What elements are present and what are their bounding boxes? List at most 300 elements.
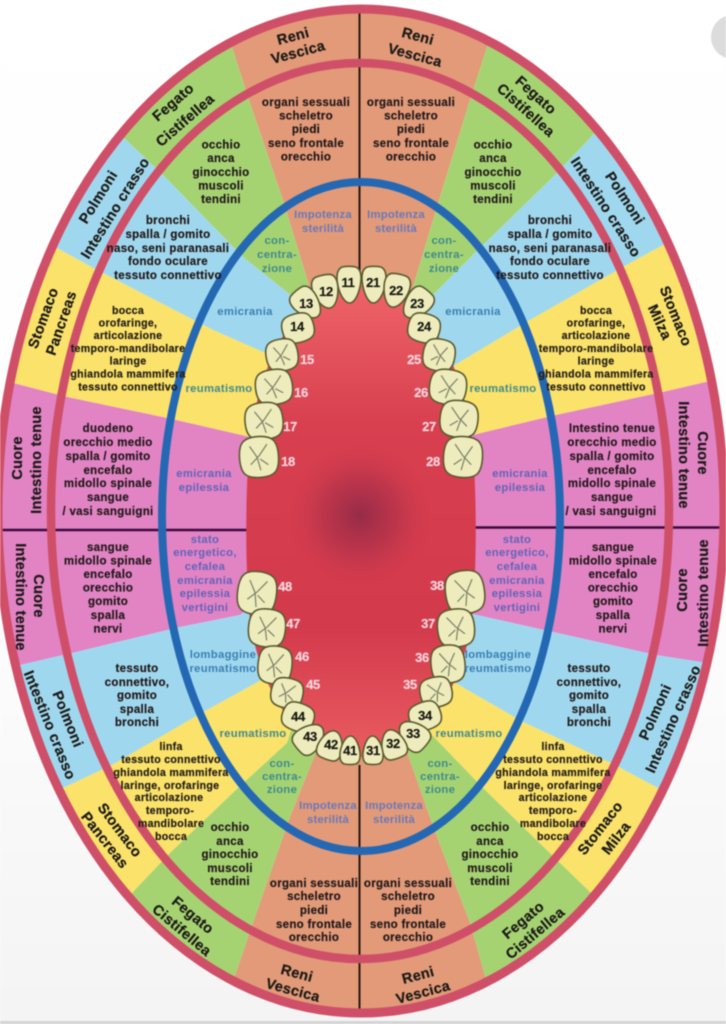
inner label: concentrazione lower left: centra- [262,771,302,783]
inner label: reumatismo upper right: reumatismo [469,383,537,395]
outer label: Cuore Intestino tenue lower right: Intestino tenue [696,539,712,647]
inner label: emicrania upper left: emicrania [217,306,273,318]
tooth 27 [422,399,480,439]
outer label: Reni Vescica lower left [264,962,322,1006]
tooth 32 [376,726,410,762]
tooth 27: 27 [422,419,436,434]
text: duodeno upper left: duodeno [83,423,133,435]
inner label: concentrazione lower left: con- [269,758,295,770]
inner label: Impotenza lower right: Impotenza [365,800,423,812]
text: intestino tenue upper right: orecchio medio [567,437,657,449]
tooth 37 [421,607,476,649]
tooth 33: 33 [406,726,420,741]
sector: Stomaco upper left [14,248,269,438]
inner label: concentrazione upper left: centra- [257,249,297,261]
text: duodeno upper left: encefalo [83,465,133,477]
text: sangue lower right: encefalo [588,569,638,581]
text: organi upper right: scheletro [384,110,438,122]
outer label: Cuore Intestino tenue upper left: Intestino tenue [29,406,45,514]
text: sangue lower left: encefalo [83,569,133,581]
tooth 28 [426,435,484,479]
tooth 25: 25 [407,352,421,367]
inner label: stato energetico left: stato [191,534,219,546]
tooth 46 [256,644,309,686]
text: sangue lower right: orecchio [588,582,638,594]
outer label: Reni Vescica upper right: Vescica [386,41,444,71]
outer label: Stomaco Milza lower right: Stomaco [575,799,627,858]
outer label: Polmoni Intestino crasso upper right: Intestino crasso [567,155,643,261]
text: organi lower right: orecchio [383,932,433,944]
inner label: stato energetico left: cefalea [185,561,226,573]
sector: Reni lower right [359,753,486,1010]
tooth 47: 47 [286,616,300,631]
tooth 41: 41 [343,743,357,758]
text: occhio upper right: occhio [474,140,512,152]
inner label: concentrazione lower right: con- [427,758,453,770]
tooth 25 [407,336,458,374]
text: duodeno upper left: sangue [87,492,129,504]
inner label: stato energetico left: emicrania [177,575,233,587]
text: occhio upper left: ginocchio [192,167,250,179]
tooth 36 [415,643,467,685]
axis: horizontal midline [0,528,724,530]
axis: vertical midline [358,13,360,1012]
sector: Polmoni lower left [20,612,261,788]
text: duodeno upper left: spalla / gomito [65,451,151,463]
outer label: Reni Vescica lower right [394,964,453,1008]
tooth 43: 43 [303,729,317,744]
text: linfa lower right: laringe, orofaringe [504,780,602,792]
text: tessuto lower left: tessuto [116,663,158,675]
text: occhio lower left: tendini [210,876,250,888]
tooth 21 [362,266,386,303]
tooth 32: 32 [386,736,400,751]
outer label: Cuore Intestino tenue lower right [675,539,712,647]
outer label: Stomaco Pancreas lower left: Stomaco [94,800,145,861]
text: organi lower left: seno frontale [276,919,352,931]
tooth 13: 13 [299,296,313,311]
text: tessuto lower right: connettivo, [557,677,621,689]
text: occhio lower right: muscoli [467,863,513,875]
tooth 11 [337,266,361,303]
inner label: stato energetico left: vertigini [182,602,228,614]
text: sangue lower right: spalla [596,610,631,622]
text: tessuto lower right: gomito [569,690,609,702]
text: bronchi upper right: tessuto connettivo [496,270,604,282]
outer label: Polmoni Intestino crasso lower left: Intestino crasso [20,669,78,782]
text: bronchi upper right: fondo oculare [510,256,590,268]
text: occhio lower left: muscoli [207,863,253,875]
text: occhio upper left: anca [207,153,235,165]
text: occhio upper right: tendini [473,194,513,206]
sector: Stomaco lower left [62,680,292,894]
text: organi upper right: seno frontale [373,138,449,150]
tooth 16: 16 [294,385,308,400]
text: organi upper left: organi sessuali [262,97,350,109]
text: sangue lower left: gomito [88,596,128,608]
text: bocca upper right: ghiandola mammifera [538,368,654,380]
text: bocca upper left: articolazione [94,330,162,342]
text: sangue lower right: gomito [593,596,633,608]
text: bocca upper left: ghiandola mammifera [70,368,186,380]
text: organi upper left: piedi [292,124,320,136]
outer label: Fegato Cistifellea upper left: Cistifellea [153,91,218,150]
outer label: Cuore Intestino tenue lower left: Intestino tenue [12,543,28,651]
inner label: stato energetico left: energetico, [173,547,237,559]
inner label: Impotenza lower left: Impotenza [299,800,357,812]
outer label: Polmoni Intestino crasso lower left: Polmoni [49,689,86,750]
text: occhio upper right: ginocchio [464,167,522,179]
inner label: lombaggine right: lombaggine [465,649,531,661]
sector: Cuore lower right [472,529,720,663]
text: bocca upper right: orofaringe, [567,318,625,330]
tooth 42 [314,727,348,763]
text: linfa lower right: tessuto connettivo [503,754,603,766]
tooth 18 [238,435,295,479]
inner label: Impotenza upper right: sterilità [375,223,418,235]
ring: middle red oval [51,63,669,959]
text: occhio upper left: occhio [202,140,240,152]
tooth 23: 23 [410,296,424,311]
outer label: Reni Vescica upper left: Vescica [269,38,328,68]
outer label: Reni Vescica lower right: Reni [400,964,436,988]
tooth 22 [380,272,412,310]
tooth 12 [310,273,342,311]
outer label: Cuore Intestino tenue lower left [12,543,46,651]
outer label: Fegato Cistifellea lower right: Cistifellea [503,904,569,963]
text: linfa lower left: linfa [159,741,183,753]
tooth 22: 22 [389,283,403,298]
text: bocca upper left: tessuto connettivo [78,382,178,394]
text: intestino tenue upper right: encefalo [587,465,637,477]
text: sangue lower left: nervi [94,624,122,636]
text: occhio lower right: occhio [471,822,509,834]
tooth 16 [253,367,308,407]
outer label: Reni Vescica lower left: Vescica [264,976,322,1006]
text: bronchi upper left: naso, seni paranasali [107,243,229,255]
text: bronchi upper right: spalla / gomito [507,229,593,241]
outer label: Stomaco Pancreas upper left: Pancreas [43,289,80,358]
outer label: Polmoni Intestino crasso upper left: Polmoni [76,168,121,227]
sector: Stomaco upper right [453,244,708,436]
text: bronchi upper left: tessuto connettivo [114,270,222,282]
tooth 46: 46 [295,649,309,664]
outer label: Polmoni Intestino crasso upper left: Intestino crasso [78,155,153,262]
text: linfa lower right: bocca [537,831,569,843]
outer label: Polmoni Intestino crasso lower right: Intestino crasso [643,663,705,776]
sector: Fegato lower right [407,734,591,978]
tooth 44 [278,698,318,736]
tooth 44: 44 [291,709,306,724]
text: organi lower left: piedi [300,905,328,917]
outer label: Fegato Cistifellea lower right: Fegato [500,899,548,943]
text: linfa lower left: ghiandola mammifera [113,767,229,779]
tooth 48: 48 [278,579,292,594]
outer label: Cuore Intestino tenue upper left: Cuore [10,436,26,480]
tooth 11: 11 [342,275,355,290]
inner label: concentrazione upper right: zione [429,263,459,275]
text: occhio upper left: muscoli [198,180,244,192]
text: bocca upper right: laringe [578,356,614,368]
sector: Polmoni lower right [455,614,703,788]
tooth 15: 15 [300,352,314,367]
sector: Polmoni upper right [426,133,664,367]
text: occhio upper right: anca [479,153,507,165]
sector: Polmoni upper left [56,138,298,353]
text: bocca upper left: temporo-mandibolare [71,343,185,355]
outer label: Reni Vescica lower left: Reni [279,962,315,986]
text: sangue lower left: sangue [87,542,129,554]
inner label: emicrania epilessia left: epilessia [179,482,230,494]
text: intestino tenue upper right: / vasi sanguigni [565,506,657,518]
text: intestino tenue upper right: Intestino tenue [569,423,655,435]
inner label: stato energetico left: epilessia [180,588,231,600]
tooth 41 [340,736,360,765]
text: tessuto lower right: bronchi [567,717,611,729]
tooth 14: 14 [290,319,305,334]
text: linfa lower left: laringe, orofaringe [121,780,219,792]
text: bocca upper left: bocca [112,305,144,317]
ring: inner blue oval [162,182,560,851]
text: linfa lower left: bocca [155,831,187,843]
text: organi lower left: orecchio [289,932,339,944]
tooth 38 [430,568,487,616]
mouth: red palate [246,285,476,757]
tooth 12: 12 [319,284,333,299]
text: linfa lower left: temporo- [146,805,194,817]
outer label: Fegato Cistifellea upper right: Cistifellea [493,81,558,141]
outer label: Fegato Cistifellea upper left: Fegato [150,81,198,125]
sector: Fegato upper left [124,46,310,296]
text: tessuto lower left: spalla [120,704,155,716]
tooth 15 [263,336,314,374]
outer label: Cuore Intestino tenue lower right: Cuore [675,568,691,612]
outer label: Cuore Intestino tenue upper left [10,406,45,514]
outer label: Stomaco Pancreas lower left: Pancreas [77,809,131,872]
inner label: reumatismo lower left: reumatismo [219,728,287,740]
sector: Cuore upper right [471,381,720,527]
outer label: Polmoni Intestino crasso upper right: Polmoni [601,169,647,228]
outer label: Stomaco Milza upper right: Milza [644,302,674,343]
text: bronchi upper left: spalla / gomito [125,229,211,241]
text: tessuto lower left: gomito [117,690,157,702]
tooth 26 [414,367,469,407]
outer label: Stomaco Milza upper right: Stomaco [656,284,694,349]
tooth 35 [403,674,455,710]
sector: Stomaco lower right [428,682,659,893]
text: occhio upper left: tendini [201,194,241,206]
sector: Cuore upper left [2,383,250,529]
inner label: stato energetico right: emicrania [489,575,545,587]
outer label: Cuore Intestino tenue lower left: Cuore [30,574,46,618]
outer label: Reni Vescica upper left: Reni [275,25,311,49]
inner label: stato energetico right: stato [503,534,531,546]
text: tessuto lower left: connettivo, [105,677,169,689]
text: occhio upper right: muscoli [470,180,516,192]
text: organi lower left: scheletro [287,891,341,903]
text: linfa lower left: articolazione [135,792,203,804]
text: organi upper left: seno frontale [268,138,344,150]
tooth 26: 26 [414,385,428,400]
text: intestino tenue upper right: midollo spinale [568,478,656,490]
text: occhio lower right: anca [476,836,504,848]
outer label: Stomaco Pancreas upper left [26,286,80,358]
text: bocca upper left: laringe [110,356,146,368]
inner label: lombaggine left: reumatismo [189,663,257,675]
tooth 17 [243,401,297,441]
text: intestino tenue upper right: sangue [591,492,633,504]
tooth 31 [363,736,383,765]
text: linfa lower left: tessuto connettivo [121,754,221,766]
text: sangue lower right: sangue [592,542,634,554]
inner label: stato energetico right: vertigini [494,602,540,614]
tooth 35: 35 [403,677,417,692]
sector: Fegato lower left [131,730,316,977]
inner label: concentrazione upper right: centra- [424,249,464,261]
text: bocca upper right: temporo-mandibolare [539,343,653,355]
text: linfa lower left: mandibolare [138,818,204,830]
inner label: reumatismo lower right: reumatismo [435,728,503,740]
sector: Reni lower left [234,752,361,1009]
text: sangue lower left: spalla [91,610,126,622]
text: organi upper right: orecchio [386,152,436,164]
tooth 43 [289,717,331,759]
tooth 47 [247,607,300,649]
text: organi upper right: organi sessuali [367,97,455,109]
text: sangue lower right: nervi [598,624,628,636]
text: linfa lower right: ghiandola mammifera [495,767,611,779]
tooth 36: 36 [415,650,429,665]
text: organi lower right: scheletro [381,891,435,903]
outer label: Fegato Cistifellea lower left: Cistifellea [149,902,214,960]
text: organi lower left: organi sessuali [270,878,358,890]
text: organi lower right: seno frontale [370,919,446,931]
inner label: emicrania epilessia left: emicrania [176,468,232,480]
tooth 48 [235,569,292,617]
inner label: concentrazione lower left: zione [267,784,297,796]
text: organi lower right: organi sessuali [364,878,452,890]
tooth 14 [279,310,317,346]
inner label: Impotenza upper right: Impotenza [367,209,425,221]
tooth 23 [396,283,438,325]
sector: Reni Vescica upper left [232,12,360,288]
bottom edge strip [0,1021,726,1024]
sector: Cuore lower left [2,530,248,666]
tooth 28: 28 [426,454,440,469]
text: occhio lower left: occhio [211,822,249,834]
outer label: Cuore Intestino tenue upper right: Cuore [694,431,710,475]
inner label: reumatismo upper left: reumatismo [185,383,253,395]
outer label: Reni Vescica upper left [269,25,328,68]
tooth 24: 24 [417,319,432,334]
tooth 21: 21 [366,275,380,290]
tooth 37: 37 [421,616,435,631]
inner label: stato energetico right: cefalea [497,561,538,573]
inner label: Impotenza upper left: sterilità [302,223,345,235]
inner label: emicrania upper right: emicrania [445,306,501,318]
inner label: concentrazione lower right: centra- [420,771,460,783]
text: bronchi upper left: bronchi [146,215,190,227]
tooth 45 [268,675,320,711]
inner label: concentrazione lower right: zione [425,784,455,796]
outer label: Fegato Cistifellea lower left: Fegato [168,894,216,938]
tooth 34: 34 [418,708,433,723]
text: organi upper left: scheletro [279,110,333,122]
text: occhio lower right: ginocchio [461,849,519,861]
text: bronchi upper left: fondo oculare [128,256,208,268]
inner label: lombaggine right: reumatismo [464,663,532,675]
inner label: emicrania epilessia right: emicrania [492,468,548,480]
tooth 33 [392,714,434,756]
tooth 34 [405,697,445,735]
text: bronchi upper right: naso, seni paranasali [489,243,611,255]
tooth 31: 31 [366,743,380,758]
text: tessuto lower left: bronchi [115,717,159,729]
outer label: Cuore Intestino tenue upper right: Intestino tenue [675,401,691,509]
text: bocca upper right: bocca [580,305,612,317]
text: linfa lower right: mandibolare [520,818,586,830]
text: bocca upper right: articolazione [562,330,630,342]
text: linfa lower right: temporo- [529,805,577,817]
text: intestino tenue upper right: spalla / gomito [569,451,655,463]
tooth 13 [286,283,328,325]
outer label: Reni Vescica lower right: Vescica [394,978,453,1008]
text: occhio lower right: tendini [470,876,510,888]
inner label: concentrazione upper left: zione [262,263,292,275]
tooth 42: 42 [324,737,338,752]
inner label: concentrazione upper left: con- [264,235,290,247]
text: duodeno upper left: orecchio medio [63,437,153,449]
text: tessuto lower right: tessuto [568,663,610,675]
inner label: emicrania epilessia right: epilessia [495,482,546,494]
outer label: Stomaco Milza lower right: Milza [599,819,635,858]
icon: grey corner button [711,15,726,59]
text: organi upper left: orecchio [281,152,331,164]
text: duodeno upper left: / vasi sanguigni [62,506,154,518]
sector: Fegato upper right [412,45,595,296]
inner label: Impotenza upper left: Impotenza [294,209,352,221]
tooth 45: 45 [306,677,320,692]
text: bronchi upper right: bronchi [528,215,572,227]
outer label: Fegato Cistifellea upper right: Fegato [512,73,559,118]
text: occhio lower left: anca [216,836,244,848]
inner label: concentrazione upper right: con- [431,235,457,247]
text: occhio lower left: ginocchio [201,849,259,861]
outer label: Reni Vescica upper right: Reni [400,25,436,49]
text: linfa lower right: linfa [541,741,565,753]
sector: Reni upper right [360,12,488,292]
text: organi upper right: piedi [397,124,425,136]
tooth 38: 38 [430,578,444,593]
outer label: Cuore Intestino tenue upper right [675,401,710,509]
outer label: Reni Vescica upper right [386,25,444,71]
text: duodeno upper left: midollo spinale [64,478,152,490]
text: linfa lower right: articolazione [519,792,587,804]
text: sangue lower right: midollo spinale [569,556,657,568]
outer label: Stomaco Pancreas upper left: Stomaco [26,286,62,351]
text: organi lower right: piedi [394,905,422,917]
tooth 18: 18 [281,454,295,469]
inner label: stato energetico right: epilessia [492,588,543,600]
text: bocca upper left: orofaringe, [99,318,157,330]
tooth 17: 17 [283,419,297,434]
inner label: Impotenza lower right: sterilità [373,814,416,826]
tooth 24 [405,310,443,346]
inner label: stato energetico right: energetico, [485,547,549,559]
outer label: Polmoni Intestino crasso lower right: Polmoni [637,682,675,743]
teeth: dental arch [235,266,487,765]
inner label: lombaggine left: lombaggine [190,649,256,661]
